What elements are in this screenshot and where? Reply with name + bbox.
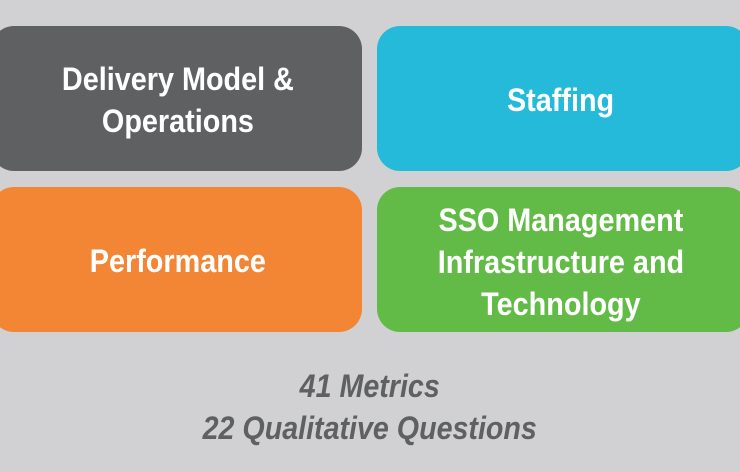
panel: Staffing (377, 26, 740, 171)
panel: SSO Management Infrastructure and Technology: Technology (481, 286, 641, 322)
panel: SSO Management Infrastructure and Technology (377, 187, 740, 332)
panel: Performance (0, 187, 362, 332)
footer text: metrics and questions: 22 Qualitative Questions (203, 410, 537, 446)
panel: Performance: Performance (89, 242, 266, 278)
panel: Delivery Model & Operations: Delivery Model & (61, 60, 294, 96)
panel: SSO Management Infrastructure and Technology: SSO Management (439, 202, 683, 238)
footer text: metrics and questions: 41 Metrics (300, 368, 440, 404)
panel: Delivery Model & Operations: Operations (101, 102, 254, 138)
footer text: metrics and questions (202, 368, 537, 446)
panel: SSO Management Infrastructure and Technology: Infrastructure and (438, 244, 684, 280)
panel: Delivery Model & Operations (0, 26, 362, 171)
panel: Staffing: Staffing (507, 82, 615, 118)
